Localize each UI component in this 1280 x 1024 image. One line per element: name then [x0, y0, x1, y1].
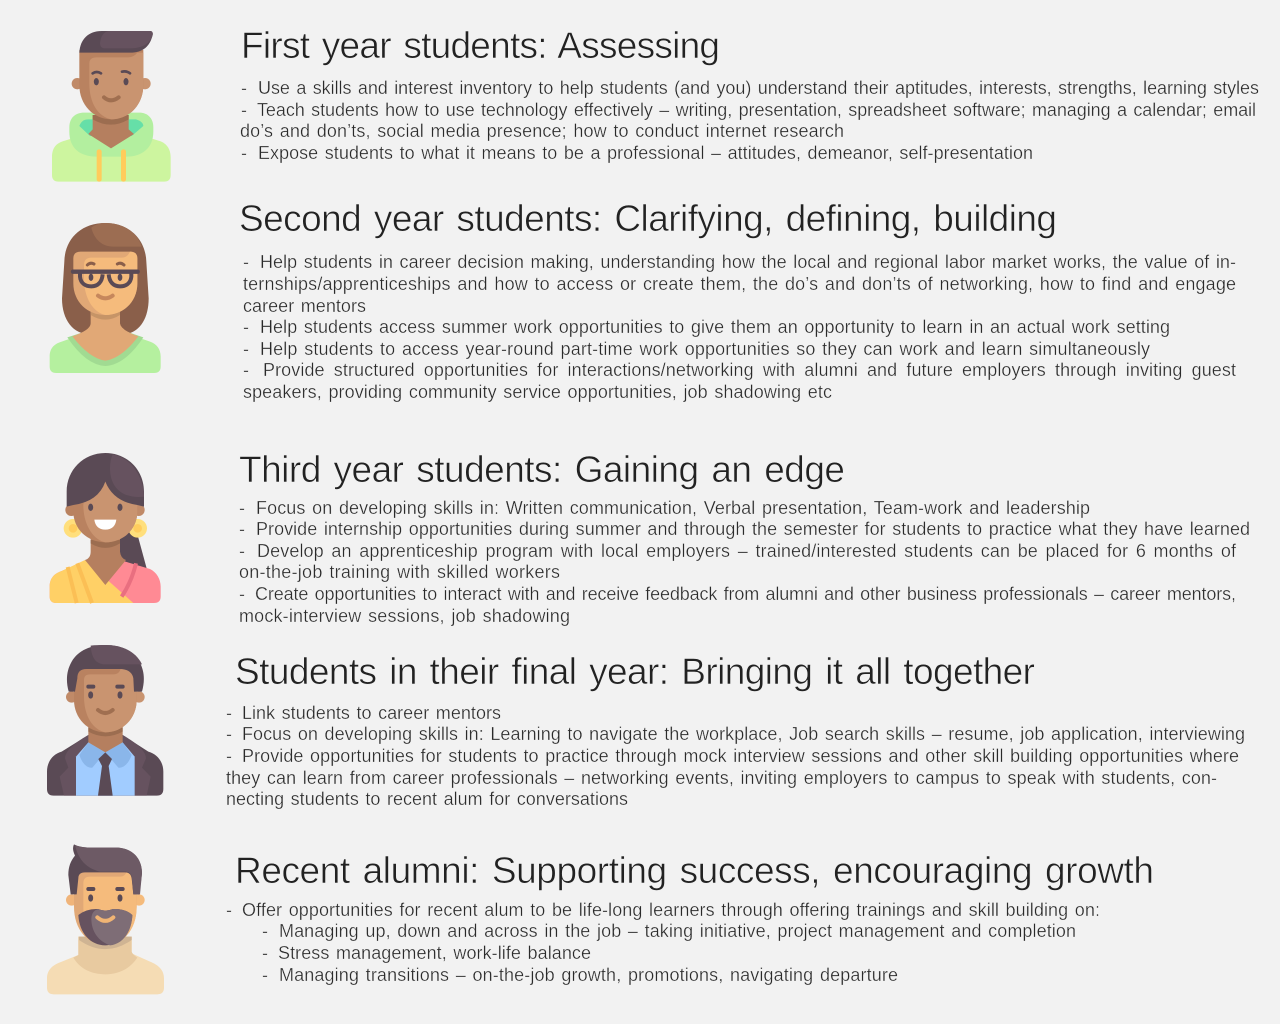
text block: second year actions: -: [243, 339, 249, 359]
text block: second year actions: Help students in career decision making, understanding how the local and regional labor market works, the value of in-: [260, 252, 1236, 272]
text block: second year actions: -: [243, 317, 249, 337]
text block: second year actions: Help students access summer work opportunities to give them an opportunity to learn in an actual work setting: [260, 317, 1170, 337]
text block: recent alumni actions: Stress management, work-life balance: [278, 943, 591, 963]
text block: final year actions: Provide opportunities for students to practice through mock interview sessions and other skill building opportunities where: [242, 746, 1239, 766]
text block: second year actions: Provide structured opportunities for interactions/networking with alumni and future employers through inviting guest: [263, 360, 1236, 380]
text block: third year actions: -: [239, 584, 245, 604]
text block: final year actions: Link students to career mentors: [242, 703, 501, 723]
text block: third year actions: on-the-job training with skilled workers: [239, 562, 560, 582]
text block: third year actions: Create opportunities to interact with and receive feedback from alumni and other business professionals – career mentors,: [255, 584, 1236, 604]
text block: recent alumni actions: -: [262, 921, 268, 941]
text block: recent alumni actions: -: [226, 900, 232, 920]
heading: third year: Third year students: Gaining an edge: [239, 449, 845, 490]
icon: third year student avatar in sari: [50, 453, 161, 603]
text block: third year actions: -: [239, 498, 245, 518]
text block: first year actions: -: [241, 100, 247, 120]
heading: second year: Second year students: Clarifying, defining, building: [239, 198, 1057, 239]
text block: first year actions: Use a skills and interest inventory to help students (and you) understand their aptitudes, interests, strengths, learning styles: [258, 78, 1259, 98]
text block: third year actions: Focus on developing skills in: Written communication, Verbal presentation, Team-work and leadership: [256, 498, 1090, 518]
text block: recent alumni actions: -: [262, 943, 268, 963]
icon: final year student avatar in suit: [47, 645, 163, 796]
section: third year students: [239, 449, 1250, 626]
text block: third year actions: -: [239, 519, 245, 539]
section: first year students: [240, 25, 1259, 163]
text block: second year actions: career mentors: [243, 296, 366, 316]
text block: final year actions: Focus on developing skills in: Learning to navigate the workplace, Job search skills – resume, job application, interviewing: [242, 724, 1245, 744]
text block: recent alumni actions: Offer opportunities for recent alum to be life-long learners through offering trainings and skill building on:: [242, 900, 1100, 920]
section: second year students: [239, 198, 1236, 402]
text block: final year actions: -: [226, 746, 232, 766]
text block: first year actions: Expose students to what it means to be a professional – attitudes, demeanor, self-presentation: [258, 143, 1033, 163]
text block: first year actions: -: [241, 78, 247, 98]
text block: first year actions: [240, 78, 1259, 163]
text block: first year actions: do’s and don’ts, social media presence; how to conduct internet research: [240, 121, 844, 141]
text block: third year actions: [239, 498, 1250, 626]
heading: first year: First year students: Assessing: [241, 25, 720, 66]
section: students in their final year: [226, 651, 1245, 809]
text block: final year actions: [226, 703, 1245, 809]
icon: first year student avatar in green hoodie: [52, 31, 171, 182]
text block: second year actions: -: [243, 252, 249, 272]
text block: recent alumni actions: -: [262, 965, 268, 985]
text block: second year actions: [243, 252, 1236, 402]
text block: final year actions: -: [226, 703, 232, 723]
text block: third year actions: Develop an apprenticeship program with local employers – trained/interested students can be placed for 6 months of: [257, 541, 1237, 561]
text block: recent alumni actions: Managing transitions – on-the-job growth, promotions, navigating departure: [279, 965, 898, 985]
heading: final year: Students in their final year: Bringing it all together: [235, 651, 1035, 692]
text block: final year actions: necting students to recent alum for conversations: [226, 789, 628, 809]
text block: final year actions: they can learn from career professionals – networking events, inviting employers to campus to speak with students, con-: [226, 768, 1217, 788]
text block: third year actions: -: [239, 541, 245, 561]
icon: second year student avatar with glasses: [50, 223, 161, 373]
text block: second year actions: ternships/apprenticeships and how to access or create them, the do’s and don’ts of networking, how to find and engage: [243, 274, 1236, 294]
text block: first year actions: Teach students how to use technology effectively – writing, presentation, spreadsheet software; managing a calendar; email: [257, 100, 1256, 120]
text block: first year actions: -: [241, 143, 247, 163]
text block: recent alumni actions: Managing up, down and across in the job – taking initiative, project management and completion: [279, 921, 1076, 941]
text block: third year actions: mock-interview sessions, job shadowing: [239, 606, 570, 626]
text block: second year actions: speakers, providing community service opportunities, job shadowing etc: [243, 382, 832, 402]
text block: final year actions: -: [226, 724, 232, 744]
text block: recent alumni actions: [226, 900, 1100, 985]
text block: second year actions: -: [243, 360, 249, 380]
icon: recent alumnus avatar with beard: [47, 844, 164, 994]
text block: second year actions: Help students to access year-round part-time work opportunities so they can work and learn simultaneously: [260, 339, 1150, 359]
text block: third year actions: Provide internship opportunities during summer and through the semester for students to practice what they have learned: [256, 519, 1250, 539]
heading: recent alumni: Recent alumni: Supporting success, encouraging growth: [235, 850, 1154, 891]
section: recent alumni: [226, 850, 1154, 985]
